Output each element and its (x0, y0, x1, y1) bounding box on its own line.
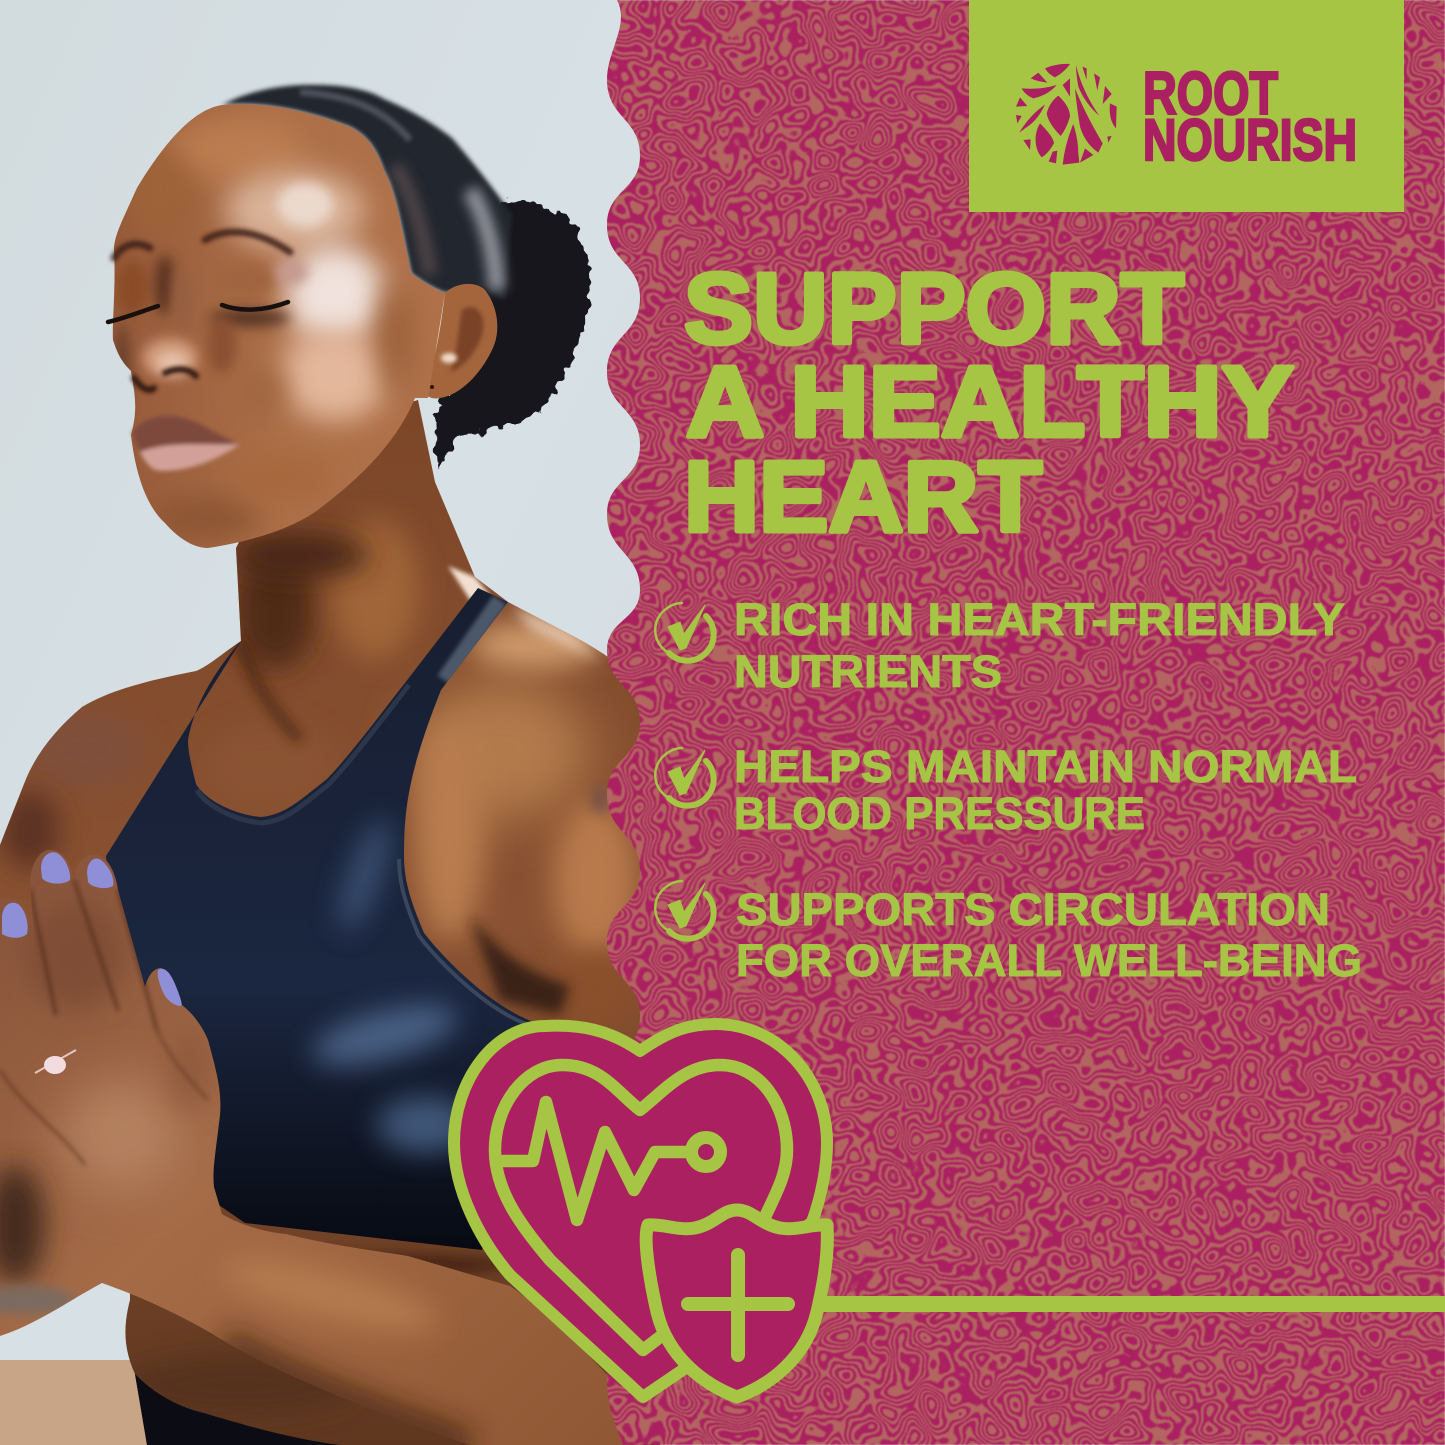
benefit 1 text (734, 594, 1345, 697)
closed eyes and lashes (108, 302, 288, 322)
nostril (134, 369, 196, 390)
horizontal green line (820, 1296, 1445, 1312)
shorts (135, 1374, 340, 1445)
icon: heart with pulse and shield (454, 1024, 827, 1397)
logo wordmark: NOURISH (1143, 108, 1357, 173)
hands and forearm (0, 850, 640, 1445)
heading (684, 253, 1294, 553)
eyebrows (114, 232, 290, 258)
torso skin with shoulders and neck (0, 400, 660, 1445)
benefit 2 text (734, 741, 1357, 839)
logo wordmark (1143, 60, 1357, 173)
benefit 3 (655, 881, 1362, 986)
benefit 2 (655, 741, 1357, 839)
ring (35, 1050, 76, 1074)
benefit 1 text: RICH IN HEART-FRIENDLY (734, 594, 1345, 645)
ear (423, 284, 497, 398)
panel: magenta labyrinth background with wavy edge (607, 0, 1445, 1445)
pulse line (503, 1102, 692, 1220)
heading: HEART (684, 441, 1042, 553)
lips (132, 416, 240, 471)
logo panel (969, 0, 1404, 212)
benefit 3 text: FOR OVERALL WELL-BEING (736, 935, 1362, 986)
panel: photo of woman meditating (0, 0, 660, 1445)
heading: SUPPORT (684, 253, 1184, 365)
benefit 3 text (736, 884, 1362, 986)
icon: brush check 2 (655, 748, 714, 806)
benefit list (655, 594, 1362, 986)
benefit 1 (655, 594, 1345, 697)
shield with plus (646, 1210, 827, 1397)
icon: brush check 1 (655, 603, 714, 661)
inner heart (495, 1065, 787, 1350)
face (108, 104, 445, 548)
heading: A HEALTHY (686, 346, 1294, 458)
hair top (222, 85, 512, 300)
photo background wall (0, 0, 660, 1445)
icon: brush check 3 (655, 881, 714, 939)
hair bun (437, 201, 590, 472)
sports bra (106, 588, 531, 1250)
logo wordmark: ROOT (1143, 60, 1278, 127)
benefit 3 text: SUPPORTS CIRCULATION (736, 884, 1330, 935)
benefit 2 text: HELPS MAINTAIN NORMAL (734, 741, 1357, 792)
benefit 1 text: NUTRIENTS (734, 646, 1002, 697)
logo emblem: root circle (1016, 64, 1117, 165)
benefit 2 text: BLOOD PRESSURE (734, 788, 1145, 839)
pulse end circle (692, 1138, 720, 1166)
outer heart (454, 1024, 827, 1397)
photo floor (0, 1360, 170, 1445)
fingernails (2, 852, 182, 1006)
